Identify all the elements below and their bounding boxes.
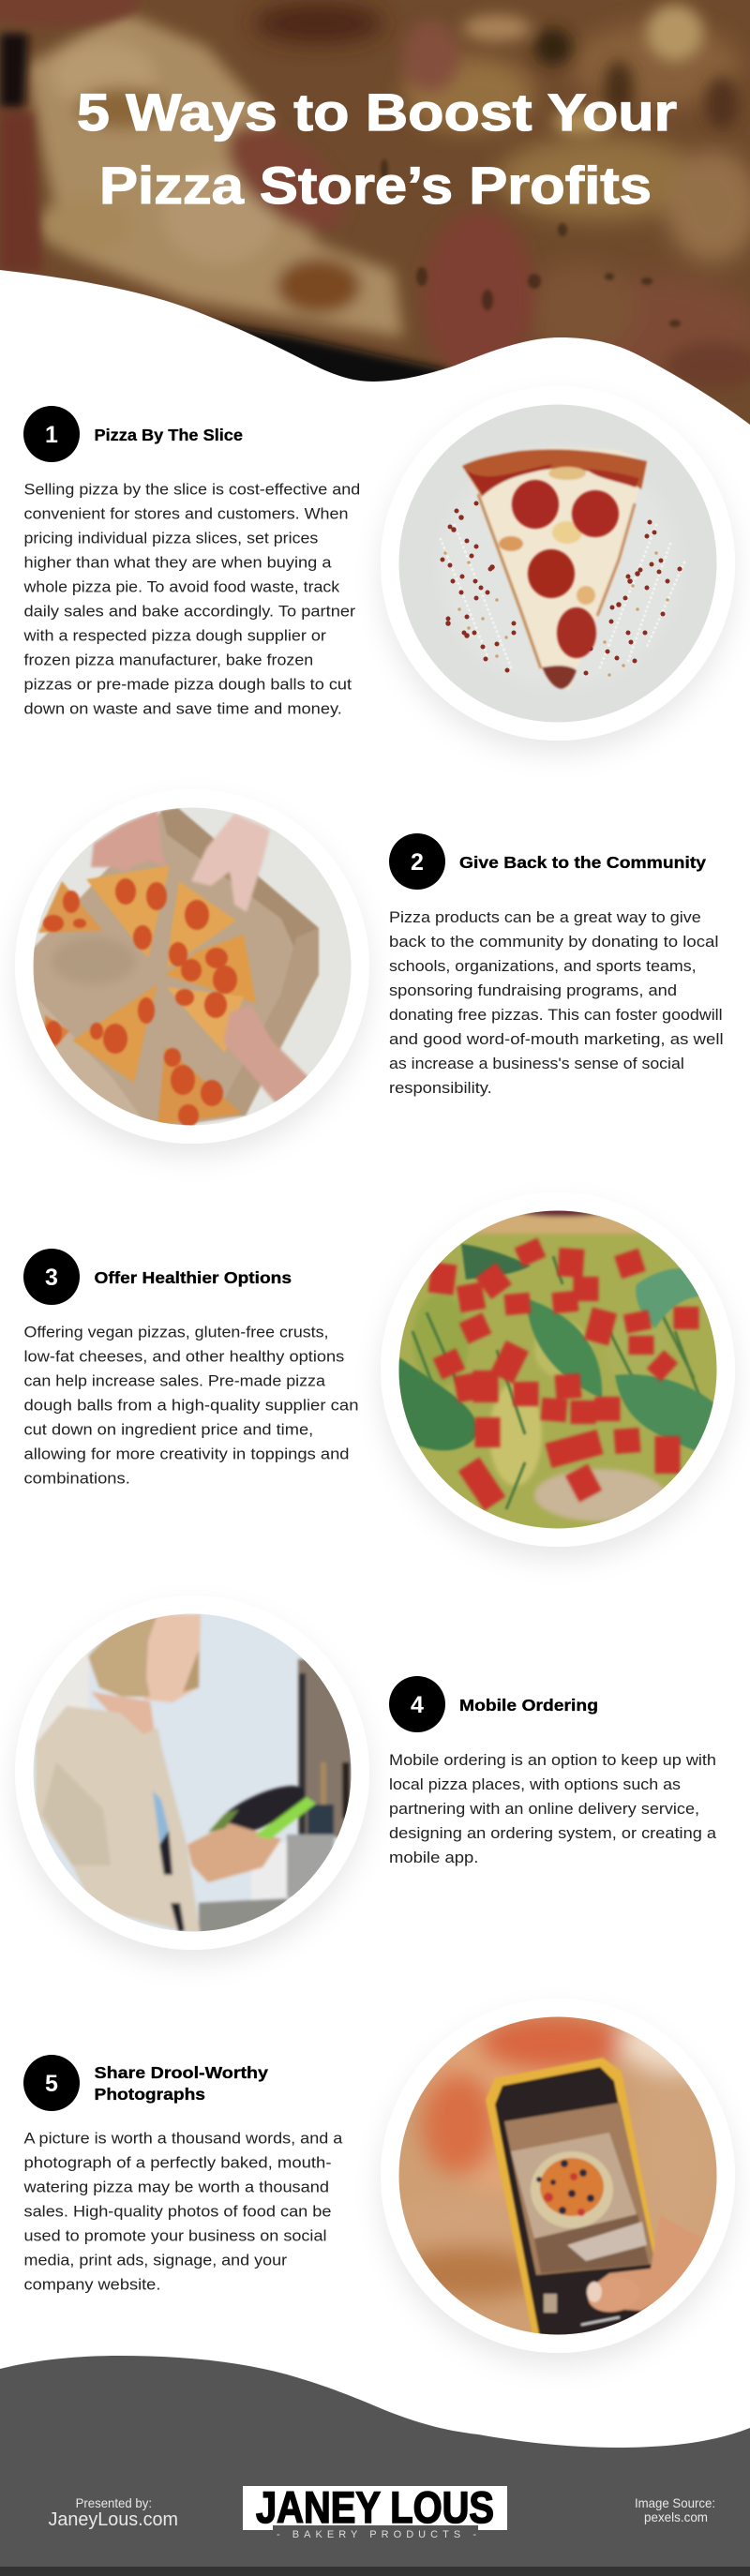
- number badge 3: [23, 1249, 80, 1305]
- body text 4: partnering with an online delivery service,: [389, 1801, 699, 1818]
- number badge 1: 1: [45, 422, 58, 448]
- photo: phone photographing a pizza: [381, 1999, 735, 2353]
- footer bottom bar: [0, 2567, 750, 2576]
- body text 5: [22, 2131, 343, 2294]
- number badge 3: 3: [45, 1265, 58, 1291]
- number badge 2: [389, 833, 445, 890]
- body text 2: and good word-of-mouth marketing, as well: [389, 1031, 724, 1048]
- body text 2: responsibility.: [389, 1080, 492, 1097]
- number badge 5: 5: [45, 2071, 58, 2097]
- body text 4: [389, 1752, 717, 1866]
- body text 4: mobile app.: [389, 1850, 478, 1866]
- body text 5: watering pizza may be worth a thousand: [22, 2179, 329, 2196]
- heading: share drool-worthy photographs: [94, 2063, 268, 2104]
- number badge 5: [23, 2055, 80, 2111]
- body text 3: combinations.: [24, 1471, 130, 1488]
- body text 4: designing an ordering system, or creating a: [389, 1825, 717, 1842]
- body text 2: [389, 909, 724, 1097]
- body text 3: Offering vegan pizzas, gluten-free crusts,: [24, 1325, 328, 1341]
- panel: step 4 mobile ordering: [15, 1595, 717, 1950]
- image source credit: pexels.com: [644, 2509, 708, 2524]
- photo: woman using a phone: [15, 1595, 369, 1950]
- number badge 4: 4: [411, 1692, 424, 1718]
- body text 3: cut down on ingredient price and time,: [24, 1422, 313, 1439]
- body text 4: Mobile ordering is an option to keep up with: [389, 1752, 716, 1769]
- logo: janey lous bakery products: - BAKERY PRODUCTS -: [277, 2529, 476, 2540]
- heading: share drool-worthy photographs: Share Drool-Worthy: [94, 2063, 268, 2082]
- body text 2: Pizza products can be a great way to give: [389, 909, 701, 926]
- panel: step 2 give back to the community: [15, 789, 724, 1144]
- logo: janey lous bakery products: JANEY LOUS: [256, 2482, 494, 2532]
- heading: give back: Give Back to the Community: [459, 853, 706, 872]
- body text 1: frozen pizza manufacturer, bake frozen: [24, 652, 313, 669]
- body text 5: used to promote your business on social: [24, 2228, 326, 2245]
- body text 1: [22, 482, 360, 718]
- photo: pizza slice on plate: [381, 386, 735, 741]
- panel: hero photo of pizza slice: [0, 0, 750, 441]
- body text 1: pricing individual pizza slices, set prices: [24, 531, 318, 547]
- body text 2: as increase a business's sense of social: [389, 1056, 684, 1072]
- body text 1: pizzas or pre-made pizza dough balls to cut: [24, 677, 352, 694]
- body text 5: photograph of a perfectly baked, mouth-: [24, 2155, 332, 2172]
- body text 3: dough balls from a high-quality supplier can: [24, 1398, 358, 1415]
- number badge 1: [23, 406, 80, 462]
- number badge 4: [389, 1676, 445, 1732]
- body text 5: company website.: [24, 2277, 160, 2294]
- body text 2: donating free pizzas. This can foster goodwill: [389, 1007, 723, 1024]
- body text 1: convenient for stores and customers. When: [24, 506, 349, 523]
- body text 3: low-fat cheeses, and other healthy options: [24, 1349, 344, 1366]
- body text 5: sales. High-quality photos of food can be: [24, 2204, 332, 2221]
- presented by credit: Presented by:: [76, 2495, 152, 2510]
- panel: footer: [0, 2356, 750, 2576]
- body text 5: media, print ads, signage, and your: [24, 2253, 288, 2269]
- body text 1: down on waste and save time and money.: [24, 701, 342, 718]
- body text 2: sponsoring fundraising programs, and: [389, 982, 677, 999]
- title: Pizza Store’s Profits: [99, 156, 652, 215]
- title: [77, 82, 677, 215]
- image source credit: Image Source:: [635, 2495, 715, 2510]
- body text 1: daily sales and bake accordingly. To partner: [24, 604, 356, 621]
- image source credit: [635, 2495, 715, 2524]
- body text 2: back to the community by donating to local: [389, 934, 718, 951]
- number badge 2: 2: [411, 849, 424, 876]
- heading: share drool-worthy photographs: Photographs: [94, 2085, 205, 2104]
- body text 2: schools, organizations, and sports teams,: [389, 958, 697, 975]
- panel: step 5 share drool-worthy photographs: [22, 1999, 735, 2353]
- presented by credit: [49, 2495, 178, 2530]
- heading: pizza by the slice: Pizza By The Slice: [94, 426, 243, 444]
- photo: hands taking pizza slices from box: [15, 789, 369, 1144]
- body text 4: local pizza places, with options such as: [389, 1776, 681, 1793]
- presented by credit: JaneyLous.com: [49, 2509, 178, 2530]
- title: 5 Ways to Boost Your: [77, 82, 677, 142]
- footer wave background: [0, 2356, 750, 2576]
- body text 3: allowing for more creativity in toppings and: [24, 1446, 349, 1463]
- panel: step 3 offer healthier options: [23, 1192, 735, 1547]
- body text 3: can help increase sales. Pre-made pizza: [24, 1373, 326, 1390]
- body text 1: Selling pizza by the slice is cost-effective and: [24, 482, 360, 499]
- photo: vegetable pizza with tomato and basil: [381, 1192, 735, 1547]
- panel: step 1 pizza by the slice: [22, 386, 735, 741]
- body text 5: A picture is worth a thousand words, and a: [24, 2131, 343, 2148]
- body text 1: higher than what they are when buying a: [24, 555, 332, 572]
- heading: mobile ordering: Mobile Ordering: [459, 1696, 598, 1715]
- body text 3: [24, 1325, 358, 1488]
- body text 1: whole pizza pie. To avoid food waste, track: [22, 579, 340, 596]
- heading: healthier options: Offer Healthier Options: [94, 1268, 292, 1287]
- body text 1: with a respected pizza dough supplier or: [22, 628, 326, 645]
